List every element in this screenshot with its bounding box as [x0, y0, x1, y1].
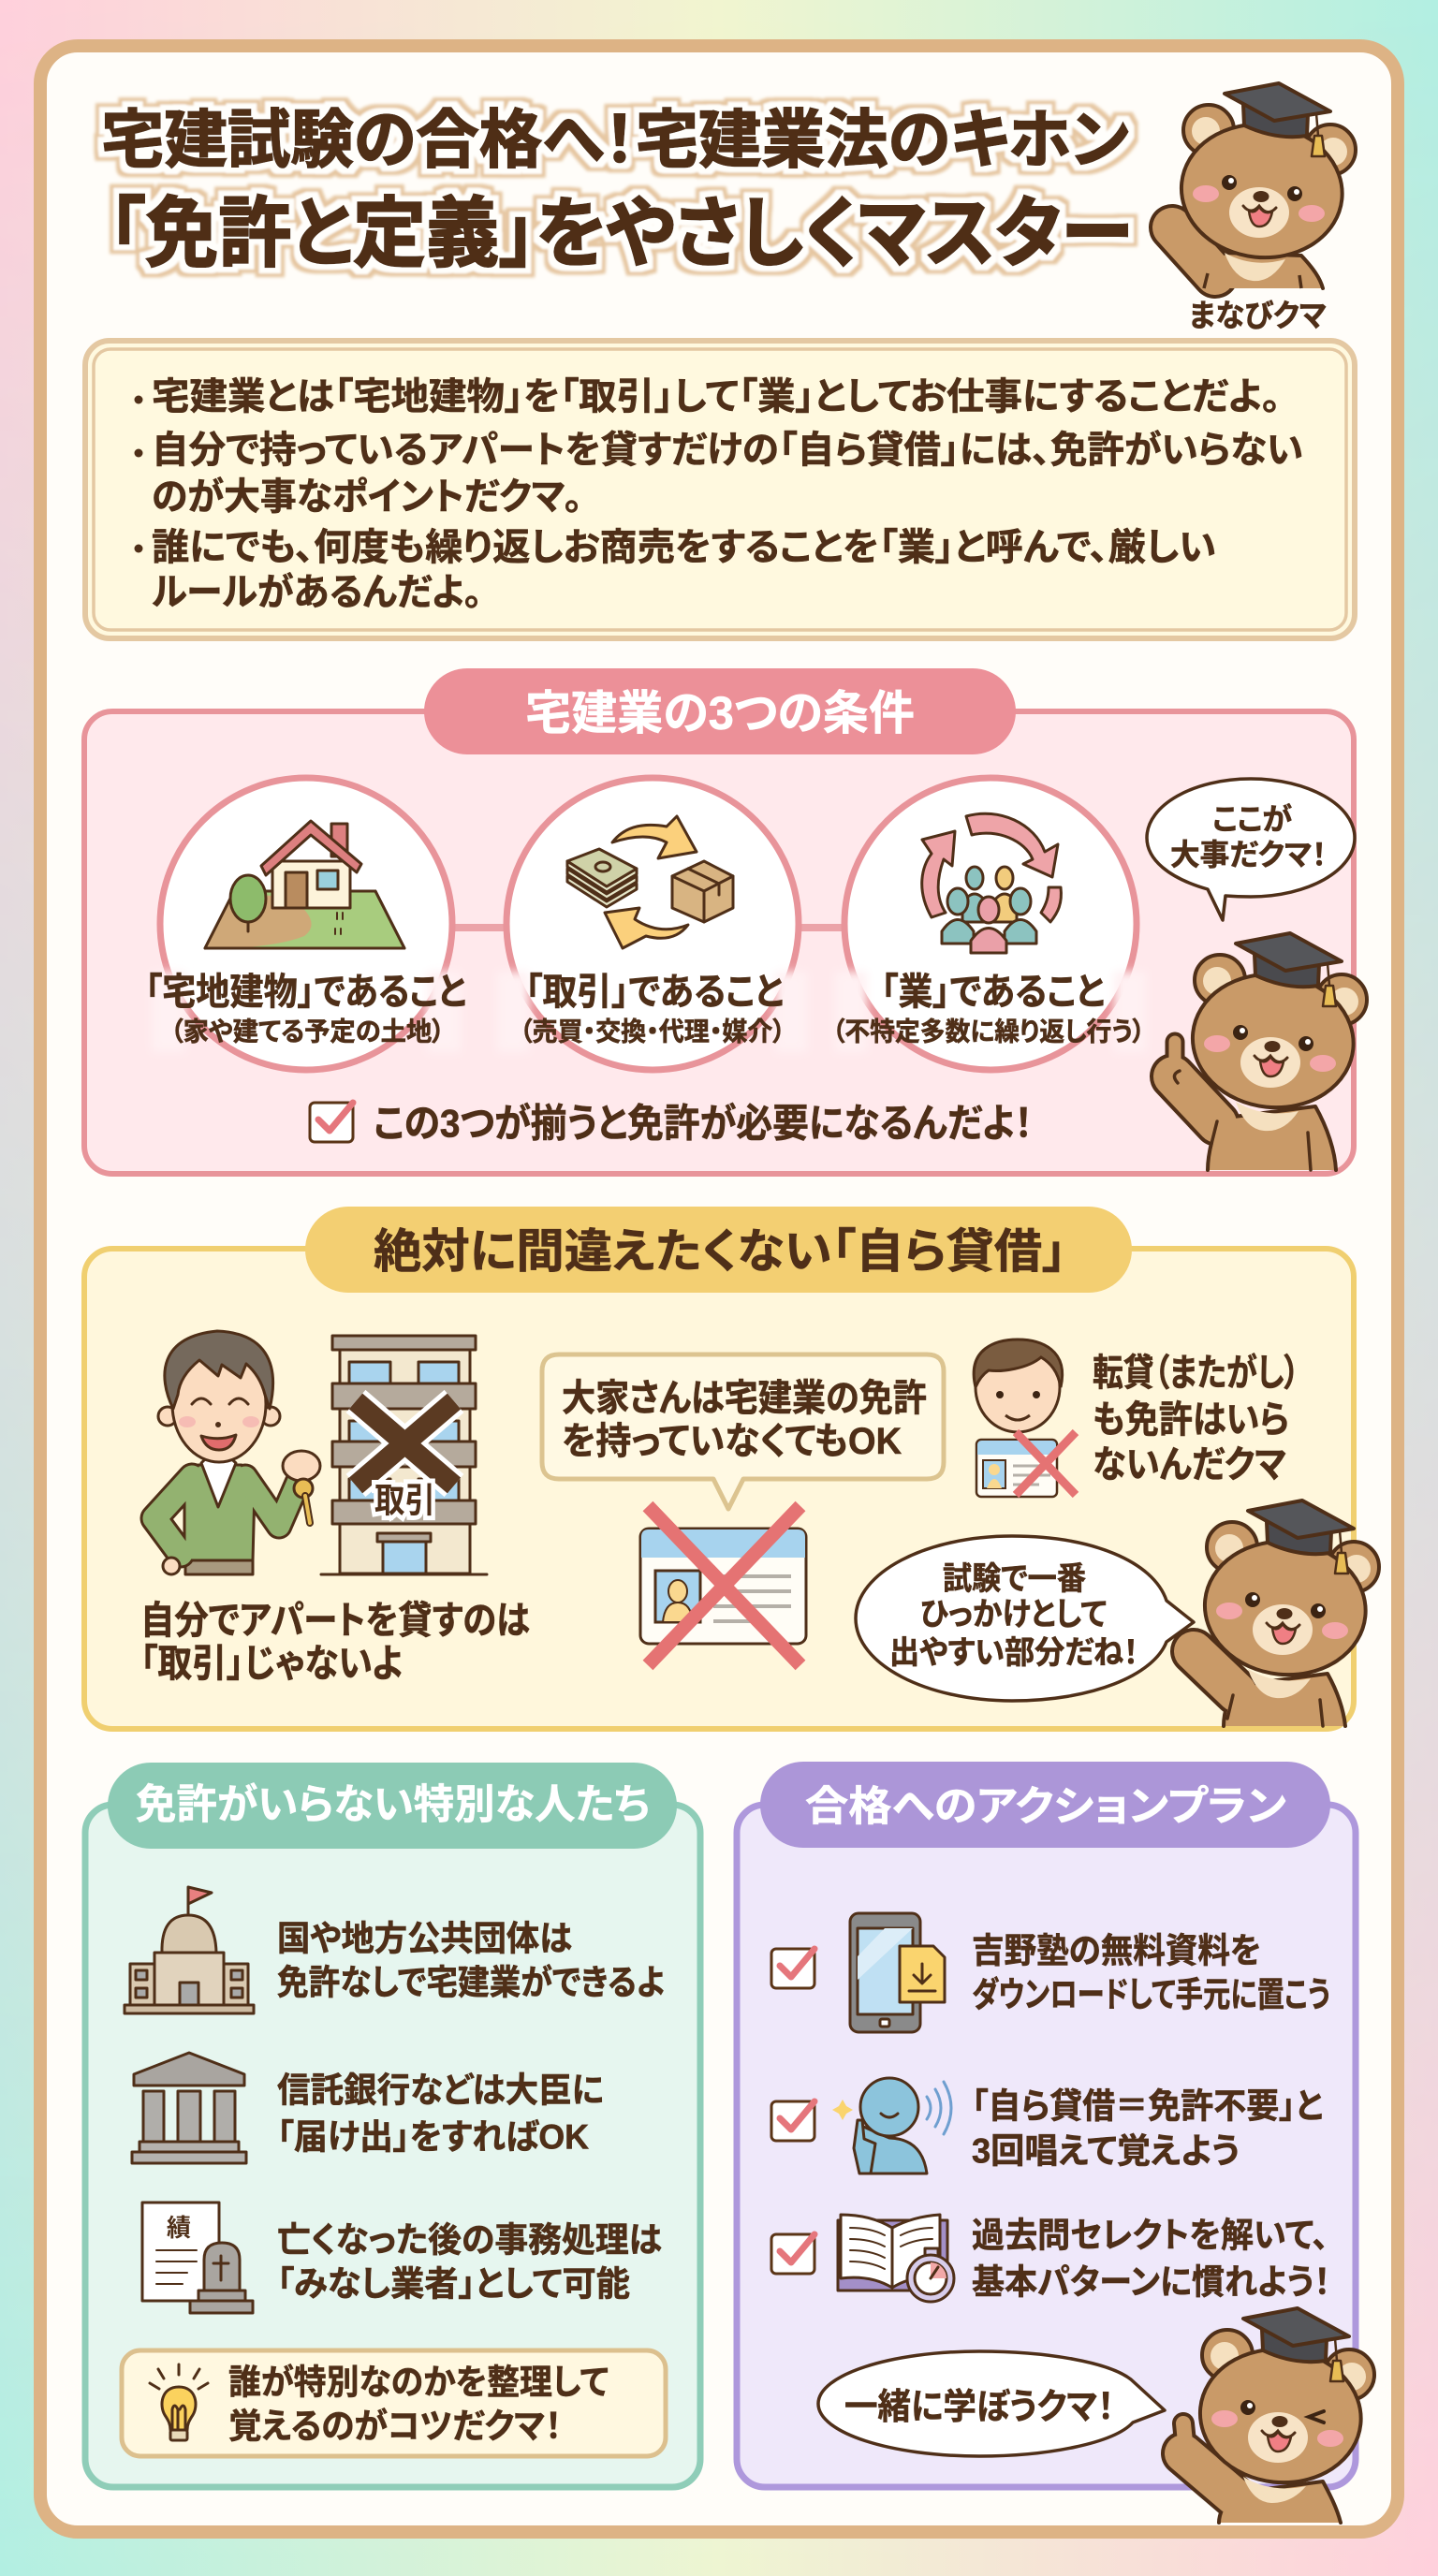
text: past exams: 基本パターンに慣れよう！	[972, 2263, 1330, 2301]
tip text: 誰が特別なのかを整理して	[228, 2363, 609, 2402]
panel: action plan	[737, 1762, 1374, 2523]
connectors	[449, 924, 852, 931]
note: この3つが揃うと免許が必要になるんだよ！	[374, 1101, 1033, 1146]
summary text: 宅建業とは「宅地建物」を「取引」して「業」としてお仕事にすることだよ。	[152, 376, 1281, 417]
text: past exams	[972, 2217, 1330, 2301]
text: download: 吉野塾の無料資料を	[972, 1932, 1261, 1969]
speech bubble: important: 大事だクマ！	[1170, 838, 1327, 871]
condition labels: （不特定多数に繰り返し行う）	[832, 1017, 1145, 1046]
cross mark on apartment	[356, 1401, 454, 1520]
text: trust bank: 信託銀行などは大臣に	[277, 2071, 604, 2110]
icon: house	[205, 821, 404, 948]
cross mark on apartment: 取引	[374, 1481, 435, 1520]
icon: document and grave	[142, 2203, 253, 2313]
icon: repeated trading with crowd	[922, 813, 1061, 953]
icon: government building	[125, 1887, 254, 2013]
speech bubble: important	[1147, 779, 1355, 920]
icon: trust bank	[132, 2053, 246, 2163]
icon: document and grave: 績	[167, 2214, 191, 2242]
mascot name: まなびクマ	[1189, 298, 1327, 333]
caption: landlord: 自分でアパートを貸すのは	[140, 1599, 530, 1642]
speech bubble: trap: ひっかけとして	[920, 1597, 1107, 1632]
condition labels: 「宅地建物」であること	[145, 972, 466, 1013]
panel: exempt people	[85, 1763, 700, 2487]
condition labels: 「業」であること	[881, 972, 1105, 1013]
heading pill: 合格へのアクションプラン	[805, 1784, 1286, 1829]
summary text: 誰にでも、何度も繰り返しお商売をすることを「業」と呼んで、厳しい	[152, 527, 1216, 568]
condition labels: （売買・交換・代理・媒介）	[520, 1017, 785, 1046]
heading pill: 絶対に間違えたくない「自ら貸借」	[374, 1225, 1066, 1278]
heading pill	[108, 1763, 677, 1849]
icon: check 3	[771, 2234, 814, 2274]
text: government: 免許なしで宅建業ができるよ	[277, 1964, 665, 2001]
icon: check	[310, 1103, 353, 1142]
caption: landlord: 「取引」じゃないよ	[140, 1642, 403, 1685]
text: download: ダウンロードして手元に置こう	[972, 1975, 1330, 2014]
speech bubble: study together	[818, 2351, 1165, 2456]
heading pill	[760, 1762, 1330, 1848]
heading pill: 免許がいらない特別な人たち	[136, 1782, 650, 1827]
text: recite: 「自ら貸借＝免許不要」と	[972, 2087, 1323, 2125]
icon: check 2	[771, 2101, 814, 2141]
icon: crossed license card	[640, 1506, 806, 1665]
text: trust bank	[277, 2071, 604, 2157]
mascot: header bear	[1172, 83, 1356, 288]
mascot: thumbs-up bear	[1183, 2308, 1374, 2523]
title	[101, 105, 1133, 277]
condition labels	[145, 972, 1145, 1046]
speech bubble: study together: 一緒に学ぼうクマ！	[844, 2388, 1114, 2427]
title: 宅建試験の合格へ！宅建業法のキホン	[101, 105, 1129, 176]
sublease text	[1093, 1353, 1299, 1486]
summary text: 自分で持っているアパートを貸すだけの「自ら貸借」には、免許がいらない	[152, 430, 1303, 471]
icon: money and box exchange	[567, 816, 733, 948]
text: download	[972, 1932, 1330, 2014]
illustration: apartment	[321, 1336, 487, 1574]
tip box	[122, 2350, 666, 2456]
panel: 3 conditions	[84, 668, 1367, 1174]
panel: self-leasing	[84, 1207, 1379, 1729]
heading pill	[424, 668, 1016, 754]
title: 「免許と定義」をやさしくマスター	[109, 191, 1133, 277]
speech bubble: trap: 試験で一番	[943, 1561, 1086, 1597]
speech bubble: important: ここが	[1212, 802, 1292, 836]
heading pill	[305, 1207, 1132, 1293]
icon: check 1	[771, 1949, 814, 1988]
mascot: waving bear	[1194, 1500, 1379, 1726]
speech bubble: trap: 出やすい部分だね！	[889, 1635, 1138, 1671]
summary text	[152, 376, 1303, 613]
icon: light bulb	[150, 2364, 208, 2440]
sublease text: 転貸（またがし）	[1093, 1353, 1299, 1394]
icon: person reciting	[832, 2078, 951, 2174]
panel: summary	[85, 341, 1355, 638]
text: deemed agent: 亡くなった後の事務処理は	[277, 2220, 662, 2260]
text: past exams: 過去問セレクトを解いて、	[972, 2217, 1328, 2254]
heading pill: 宅建業の3つの条件	[525, 687, 915, 739]
text: government: 国や地方公共団体は	[277, 1919, 572, 1958]
summary text: のが大事なポイントだクマ。	[152, 476, 582, 518]
icon: phone with download	[850, 1913, 945, 2032]
speech box: landlord OK	[542, 1354, 944, 1509]
icon: book and stopwatch	[838, 2215, 954, 2302]
tip text	[228, 2363, 609, 2445]
illustration: sublease person with crossed card	[974, 1339, 1076, 1497]
sublease text: ないんだクマ	[1093, 1444, 1286, 1486]
mascot: pointing bear	[1173, 933, 1367, 1170]
speech bubble: trap	[856, 1536, 1194, 1701]
illustration: landlord	[154, 1331, 320, 1574]
sublease text: も免許はいら	[1093, 1399, 1289, 1441]
caption: landlord	[140, 1599, 530, 1685]
tip text: 覚えるのがコツだクマ！	[228, 2408, 562, 2445]
summary text: ルールがあるんだよ。	[152, 572, 482, 613]
speech box: landlord OK: 大家さんは宅建業の免許	[562, 1378, 927, 1419]
text: deemed agent: 「みなし業者」として可能	[277, 2265, 630, 2303]
text: trust bank: 「届け出」をすればOK	[277, 2117, 589, 2157]
text: government	[277, 1919, 665, 2001]
text: deemed agent	[277, 2220, 662, 2303]
speech box: landlord OK: を持っていなくてもOK	[562, 1421, 902, 1462]
condition labels: （家や建てる予定の土地）	[170, 1017, 445, 1046]
text: recite	[972, 2087, 1323, 2170]
text: recite: 3回唱えて覚えよう	[972, 2132, 1240, 2170]
condition labels: 「取引」であること	[525, 972, 784, 1013]
